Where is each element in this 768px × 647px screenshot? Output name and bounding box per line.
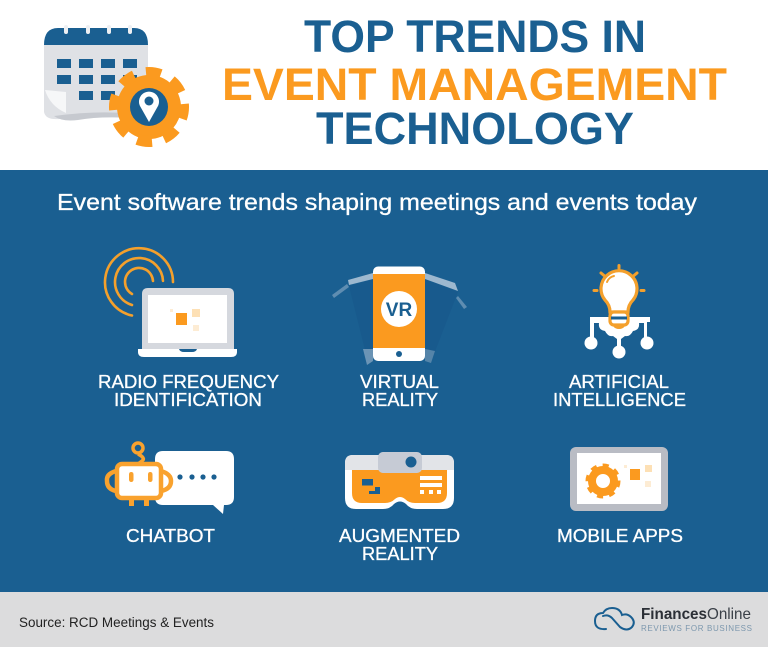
label: radio frequency identification: RADIO FREQUENCY [98, 372, 279, 392]
label: augmented reality: REALITY [362, 544, 438, 564]
label: chatbot: CHATBOT [126, 526, 215, 546]
panel: blue main background [0, 170, 768, 592]
label: virtual reality: REALITY [362, 390, 438, 410]
icon: artificial intelligence bulb [584, 266, 654, 358]
icon: chatbot [107, 443, 234, 514]
panel: grey footer [0, 592, 768, 647]
logo: FinancesOnline: FinancesOnline [641, 606, 751, 623]
label: artificial intelligence [553, 372, 686, 410]
label: augmented reality [339, 526, 460, 564]
label: artificial intelligence: ARTIFICIAL [569, 372, 669, 392]
label: radio frequency identification [98, 372, 279, 410]
title: TOP TRENDS IN [304, 11, 646, 62]
logo: FinancesOnline [595, 606, 752, 633]
title [222, 11, 727, 154]
subtitle: Event software trends shaping meetings and events today [57, 189, 698, 215]
title: TECHNOLOGY [316, 103, 634, 154]
icon: mobile apps tablet [570, 447, 668, 511]
icon: virtual reality phone: VR [386, 300, 412, 321]
label: virtual reality: VIRTUAL [360, 372, 439, 392]
label: radio frequency identification: IDENTIFICATION [114, 390, 262, 410]
icon: RFID laptop [105, 248, 237, 357]
title: EVENT MANAGEMENT [222, 59, 727, 110]
source text: Source: RCD Meetings & Events [19, 615, 214, 630]
icon: augmented reality headset [345, 452, 454, 509]
label: mobile apps: MOBILE APPS [557, 526, 683, 546]
icon: calendar with location gear [44, 25, 186, 144]
logo: FinancesOnline: REVIEWS FOR BUSINESS [641, 624, 752, 633]
label: augmented reality: AUGMENTED [339, 526, 460, 546]
icon: virtual reality phone [332, 266, 467, 365]
label: virtual reality [360, 372, 439, 410]
label: artificial intelligence: INTELLIGENCE [553, 390, 686, 410]
